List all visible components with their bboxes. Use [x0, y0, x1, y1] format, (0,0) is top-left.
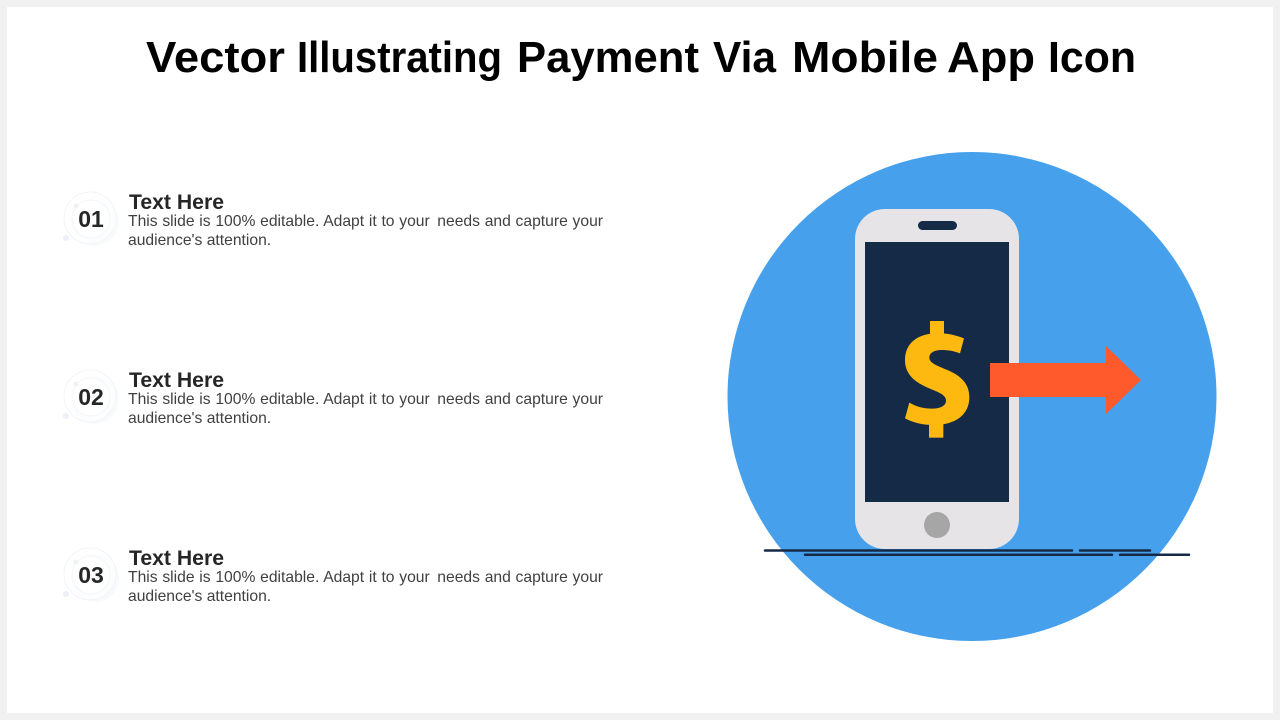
text block 01: needs and capture your — [437, 213, 603, 230]
number badge 03 — [63, 548, 116, 600]
text block 02: This slide is 100% editable. Adapt it to your — [128, 391, 430, 408]
number badge 01: 01 — [78, 206, 104, 232]
arrow — [990, 346, 1141, 414]
heading 01: Text Here — [129, 191, 224, 214]
title: Icon — [1048, 33, 1136, 82]
heading 02: Text Here — [129, 369, 224, 392]
text block 02 — [128, 391, 603, 427]
text block 02: audience's attention. — [128, 410, 271, 427]
blue circle backdrop — [728, 152, 1216, 641]
text block 03: audience's attention. — [128, 588, 271, 605]
text block 01: This slide is 100% editable. Adapt it to your — [128, 213, 430, 230]
title: Illustrating — [297, 33, 502, 82]
text block 01: audience's attention. — [128, 232, 271, 249]
icon: smartphone — [855, 209, 1019, 549]
title: Via — [713, 33, 777, 82]
number badge 03: 03 — [78, 562, 104, 588]
text block 02: needs and capture your — [437, 391, 603, 408]
text block 01 — [128, 213, 603, 249]
title: Mobile — [792, 33, 938, 82]
list item 03 — [63, 547, 603, 605]
list item 02 — [63, 369, 603, 427]
heading 03: Text Here — [129, 547, 224, 570]
text block 03: This slide is 100% editable. Adapt it to your — [128, 569, 430, 586]
ground lines — [765, 550, 1189, 555]
text block 03: needs and capture your — [437, 569, 603, 586]
title: Payment — [517, 33, 699, 82]
icon: dollar sign — [905, 321, 969, 438]
list item 01 — [63, 191, 603, 249]
title: Vector — [146, 33, 285, 82]
text block 03 — [128, 569, 603, 605]
title: App — [947, 33, 1035, 82]
number badge 01 — [63, 192, 116, 244]
title — [146, 33, 1136, 82]
number badge 02 — [63, 370, 116, 422]
number badge 02: 02 — [78, 384, 104, 410]
